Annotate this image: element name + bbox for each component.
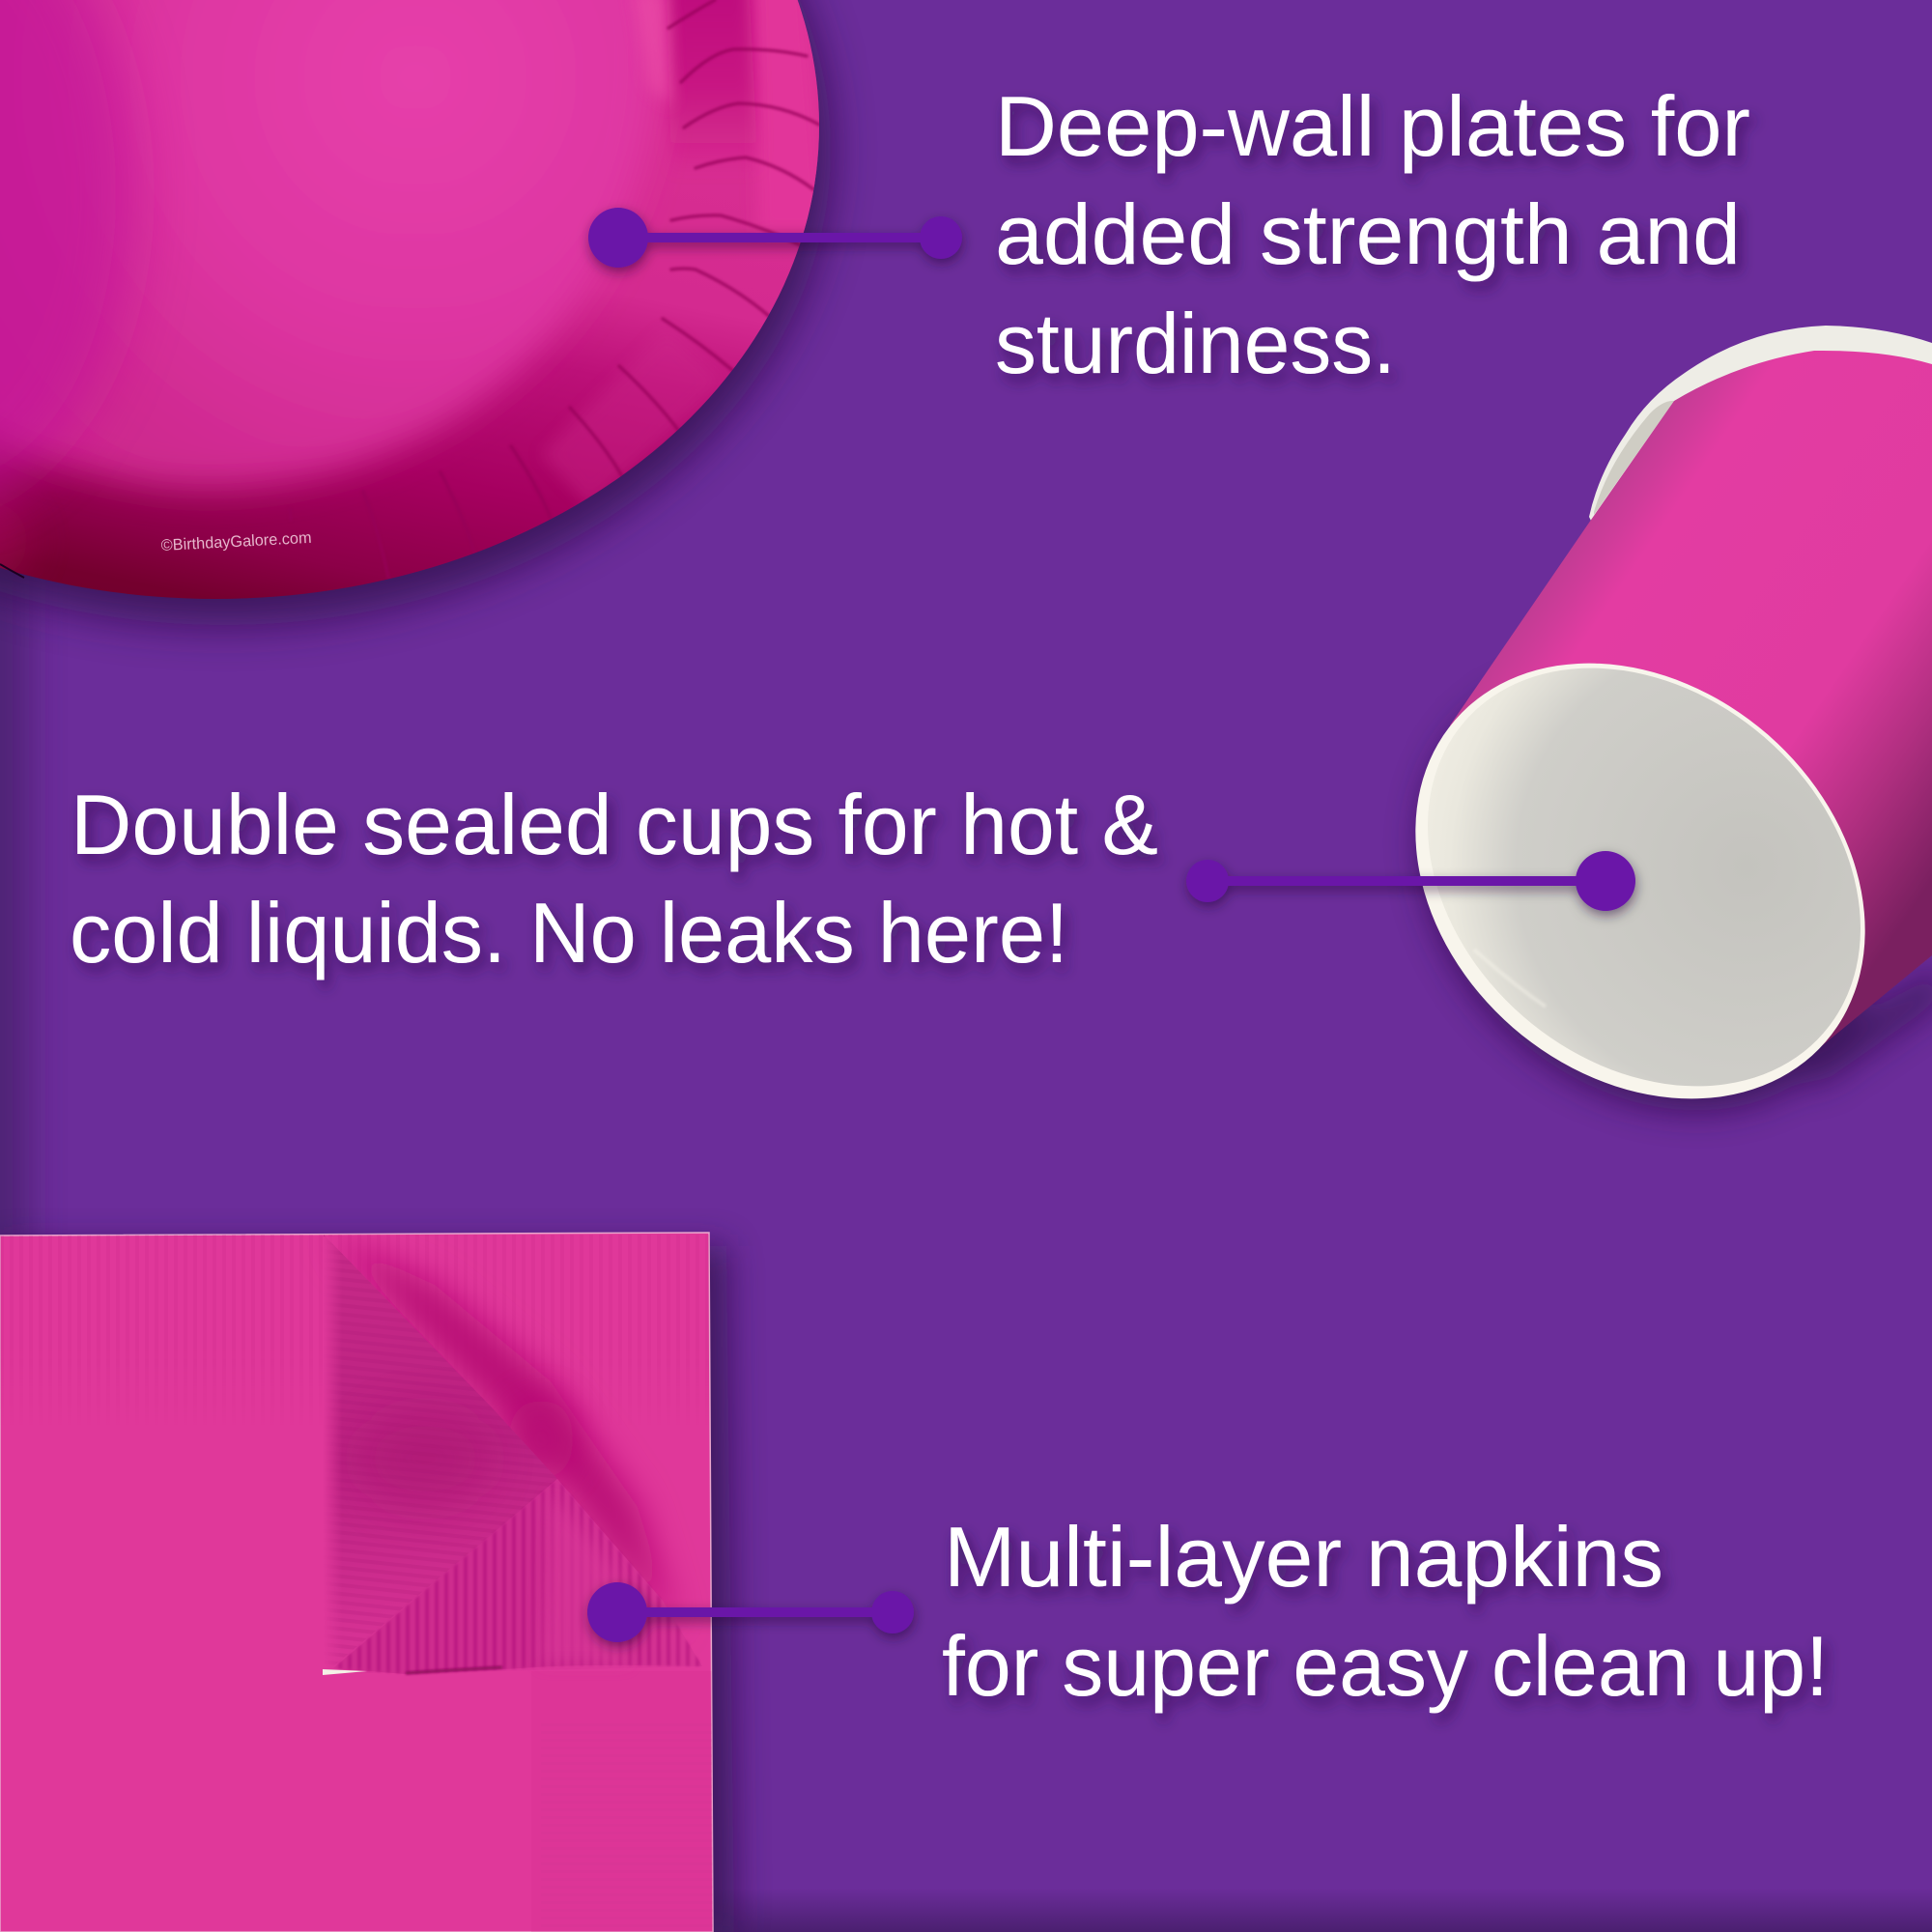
heading: plate text: Deep-wall plates for xyxy=(995,78,1750,174)
fold corner white xyxy=(323,1669,367,1675)
heading: plate text xyxy=(995,78,1750,391)
cup body xyxy=(1450,351,1932,1049)
plate body xyxy=(0,0,819,599)
heading: napkin text: Multi-layer napkins xyxy=(944,1509,1663,1605)
cup base outer lip xyxy=(1327,574,1932,1188)
fold lower triangle xyxy=(333,1479,702,1674)
heading: cup text: cold liquids. No leaks here! xyxy=(70,885,1068,980)
cup rim xyxy=(1589,326,1932,526)
napkin shadow xyxy=(0,1246,734,1932)
fold left soft edge xyxy=(323,1236,342,1671)
panel: paper plate xyxy=(0,0,831,625)
cup base inner xyxy=(1344,582,1932,1173)
callout: cup pointer xyxy=(1186,851,1635,911)
panel: napkin xyxy=(0,1233,734,1932)
callout: plate pointer xyxy=(588,208,962,268)
heading: plate text: sturdiness. xyxy=(995,296,1396,391)
fold shadow xyxy=(328,1236,676,1633)
cup shadow xyxy=(1333,585,1932,1200)
fold triangle xyxy=(323,1235,702,1675)
panel: paper cup xyxy=(1327,326,1932,1200)
napkin embossing xyxy=(0,1235,713,1932)
watermark: ©BirthdayGalore.com xyxy=(160,529,312,554)
plate left shadow sliver xyxy=(0,564,24,578)
heading: cup text xyxy=(70,777,1158,980)
cup base highlight crease xyxy=(1474,950,1546,1007)
heading: napkin text xyxy=(942,1509,1829,1714)
rim pleats xyxy=(385,0,819,578)
heading: plate text: added strength and xyxy=(995,186,1741,282)
napkin sheet xyxy=(0,1233,713,1932)
heading: napkin text: for super easy clean up! xyxy=(942,1618,1829,1714)
heading: cup text: Double sealed cups for hot & xyxy=(71,777,1158,872)
plate well and rim detail xyxy=(0,0,826,584)
plate shadow xyxy=(0,0,831,625)
callout: napkin pointer xyxy=(587,1582,914,1642)
